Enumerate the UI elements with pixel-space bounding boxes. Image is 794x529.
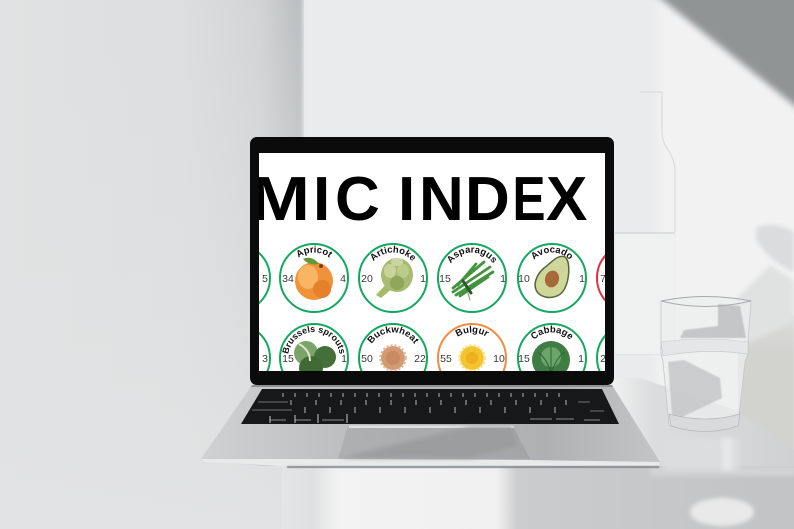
food card: Avocado: 1 [579, 273, 585, 285]
food card: Asparagus: Asparagus [448, 248, 496, 264]
partial circle, row 1 left [259, 252, 271, 304]
food card: Brussels sprouts: 15 [282, 353, 294, 365]
food card: Asparagus [437, 243, 507, 313]
title: X [546, 165, 587, 234]
food card: Buckwheat: Buckwheat [367, 326, 419, 344]
food card: Cabbage: 15 [518, 353, 530, 365]
food card: Brussels sprouts: 1 [341, 353, 347, 365]
food card: Bulgur: 10 [493, 353, 505, 365]
title: E [512, 165, 546, 234]
icon: artichoke [376, 258, 413, 298]
food card: Apricot: Apricot [297, 246, 332, 258]
food card: Buckwheat [358, 323, 428, 371]
icon: buckwheat [380, 346, 406, 370]
food card: Apricot: 4 [340, 273, 346, 285]
title: I [398, 165, 415, 234]
food card: Asparagus: 1 [500, 273, 506, 285]
partial circle, row 2 left [259, 332, 271, 371]
food card: Avocado: Avocado [532, 247, 572, 260]
partial circle, row 1 right [596, 254, 605, 302]
partial circle, row 2 left: 3 [262, 353, 268, 365]
food card: Cabbage [517, 323, 587, 371]
icon: avocado [535, 256, 569, 297]
food card: Bulgur: 55 [440, 353, 452, 365]
table block [282, 378, 794, 529]
food card: Bulgur: Bulgur [455, 326, 489, 336]
title: D [465, 165, 510, 234]
icon: apricot [295, 258, 333, 300]
partial circle, row 1 right: 7 [600, 273, 606, 285]
food card: Cabbage: 1 [578, 353, 584, 365]
carafe [615, 92, 675, 355]
food card: Brussels sprouts [279, 323, 349, 371]
title: N [419, 165, 464, 234]
partial circle, row 1 left: 5 [262, 273, 268, 285]
icon: cabbage [532, 341, 570, 371]
food card: Artichoke: 20 [361, 273, 373, 285]
food card: Artichoke: 1 [420, 273, 426, 285]
trackpad [338, 426, 530, 459]
title: M [250, 165, 310, 234]
laptop [201, 137, 660, 468]
icon: bulgur [460, 346, 484, 370]
drinking glass [661, 296, 751, 432]
food card: Apricot: 34 [282, 273, 294, 285]
partial circle, row 2 right [596, 334, 605, 371]
partial circle, row 2 right: 2 [600, 353, 606, 365]
food card: Artichoke: Artichoke [371, 246, 415, 262]
food card: Avocado: 10 [518, 273, 530, 285]
title: C [335, 165, 380, 234]
icon: asparagus [453, 262, 493, 300]
food card: Cabbage: Cabbage [531, 326, 572, 339]
screen bezel [250, 137, 614, 385]
food card: Artichoke [358, 243, 428, 313]
food card: Apricot [279, 243, 349, 313]
food card: Avocado [517, 243, 587, 313]
laptop base [201, 385, 660, 468]
food card: Buckwheat: 50 [361, 353, 373, 365]
title: I [313, 165, 330, 234]
food card: Asparagus: 15 [439, 273, 451, 285]
food card: Buckwheat: 22 [414, 353, 426, 365]
screen content [259, 153, 605, 371]
icon: brussels sprouts [294, 341, 336, 371]
food card: Brussels sprouts: Brussels sprouts [282, 326, 344, 354]
keyboard [241, 389, 619, 424]
food card: Bulgur [437, 323, 507, 371]
